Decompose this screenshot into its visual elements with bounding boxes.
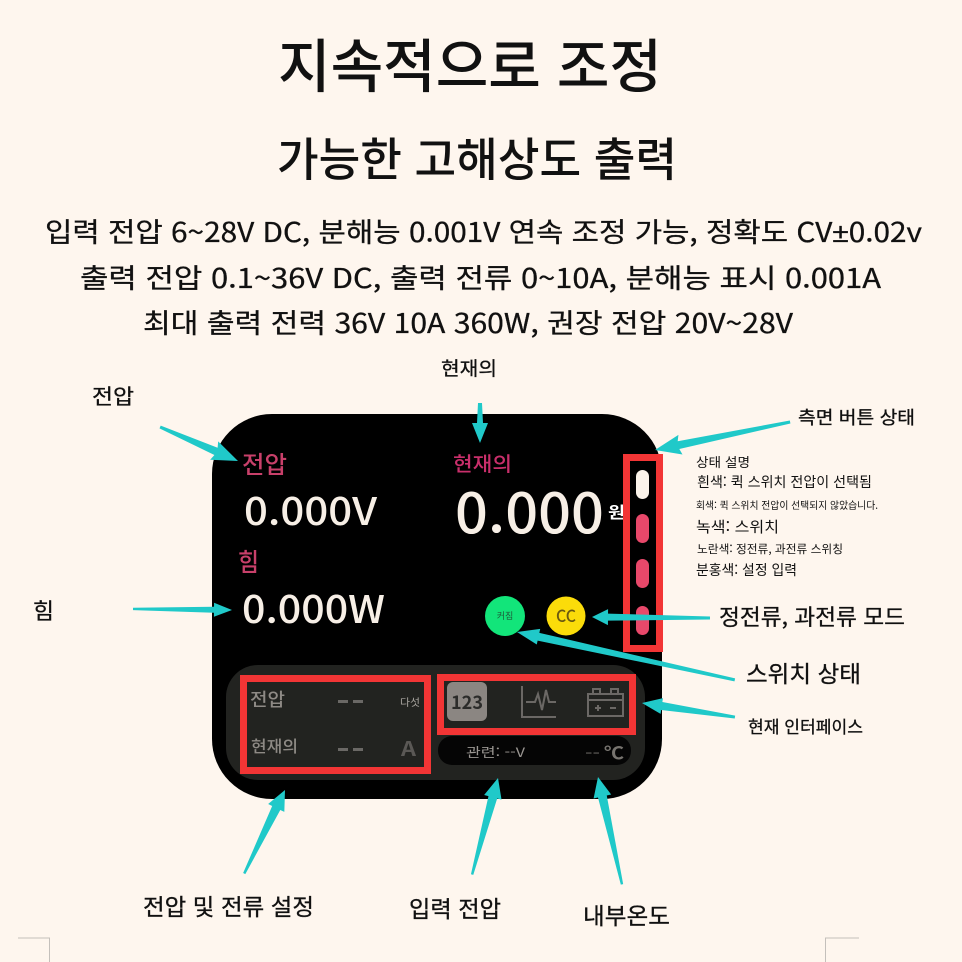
icon: waveform chart — [522, 686, 556, 717]
current reading: 현재의 — [453, 448, 512, 477]
arrow: power — [133, 602, 232, 617]
subtitle: 가능한 고해상도 출력 — [277, 124, 677, 190]
voltage and current settings — [244, 678, 428, 770]
voltage and current settings: 현재의 — [251, 733, 298, 757]
side button status bar — [626, 458, 660, 648]
label: current: 현재의 — [441, 354, 497, 381]
CC mode indicator: CC — [556, 602, 576, 627]
status legend text block: 회색: 퀵 스위치 전압이 선택되지 않았습니다. — [696, 497, 878, 512]
title: 지속적으로 조정 — [278, 20, 662, 104]
power reading — [238, 543, 385, 634]
icon: 123 numeric tab — [447, 682, 487, 721]
switch status indicator: 커짐 — [497, 609, 513, 622]
icon: 123 numeric tab: 123 — [451, 689, 483, 715]
label: switch status: 스위치 상태 — [746, 655, 861, 689]
voltage reading — [242, 445, 377, 536]
arrow: side button status — [653, 412, 792, 460]
voltage reading: 전압 — [242, 445, 287, 480]
current interface tabs — [440, 678, 632, 732]
power reading: 힘 — [238, 543, 259, 579]
status legend text block: 노란색: 정전류, 과전류 스위칭 — [697, 541, 843, 557]
label: CC and OC mode: 정전류, 과전류 모드 — [719, 600, 905, 632]
lower control strip — [226, 665, 645, 780]
panel: device screen — [212, 414, 662, 799]
status legend text block: 분홍색: 설정 입력 — [696, 560, 797, 580]
current reading: 원 — [608, 499, 625, 523]
icon: battery — [588, 689, 623, 716]
label: input voltage: 입력 전압 — [409, 890, 501, 924]
label: voltage and current setting: 전압 및 전류 설정 — [143, 888, 314, 922]
voltage and current settings: 전압 — [250, 686, 285, 712]
specification text block: 입력 전압 6~28V DC, 분해능 0.001V 연속 조정 가능, 정확도 CV ±0.02v — [45, 211, 922, 250]
label: voltage: 전압 — [92, 381, 134, 411]
status legend text block: 녹색: 스위치 — [696, 516, 779, 537]
current reading: 0.000 — [455, 469, 604, 549]
switch status indicator — [485, 596, 525, 636]
arrow: input voltage — [463, 776, 507, 877]
status legend text block: 흰색: 퀵 스위치 전압이 선택됨 — [697, 472, 872, 492]
input voltage and temperature readout: ℃ — [604, 739, 624, 764]
label: internal temperature: 내부온도 — [583, 897, 670, 931]
specification text block: 출력 전압 0.1~36V DC, 출력 전류 0~10A, 분해능 표시 0.001A — [80, 257, 882, 296]
voltage and current settings: 다섯 — [400, 694, 420, 709]
arrow: voltage — [156, 418, 242, 470]
input voltage and temperature readout: -- — [585, 743, 600, 762]
arrow: CC mode — [592, 609, 710, 626]
arrow: switch status — [515, 624, 737, 688]
voltage and current settings: A — [400, 733, 416, 762]
arrow: voltage and current setting — [236, 786, 293, 878]
arrow: current — [472, 403, 488, 443]
voltage reading: 0.000V — [244, 481, 377, 536]
label: current interface: 현재 인터페이스 — [748, 713, 863, 738]
power reading: 0.000W — [242, 579, 385, 634]
input voltage and temperature readout — [438, 736, 631, 765]
arrow: interface — [641, 695, 736, 725]
input voltage and temperature readout: 관련: --V — [466, 742, 526, 761]
specification text block: 최대 출력 전력 36V 10A 360W, 권장 전압 20V~28V — [143, 302, 794, 341]
CC mode indicator — [546, 596, 586, 636]
arrow: internal temperature — [589, 775, 631, 886]
crop mark left — [18, 938, 50, 962]
label: side button status: 측면 버튼 상태 — [798, 404, 915, 430]
label: power: 힘 — [33, 594, 54, 626]
status legend text block — [696, 452, 878, 580]
status legend text block: 상태 설명 — [696, 452, 750, 471]
current reading — [453, 448, 625, 549]
crop mark right — [826, 938, 859, 962]
specification text block — [45, 211, 922, 341]
